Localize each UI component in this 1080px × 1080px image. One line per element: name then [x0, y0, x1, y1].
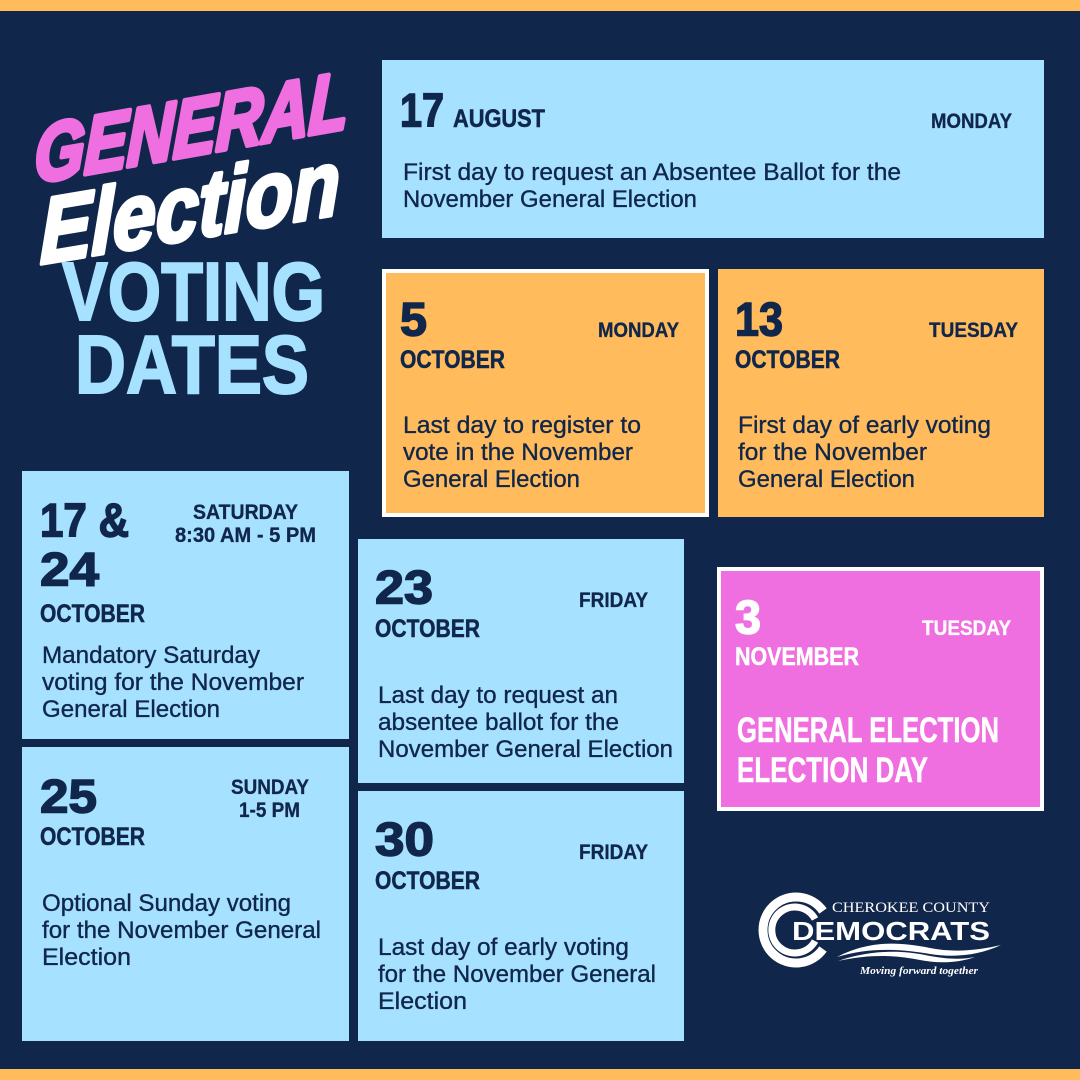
title: Dates: DATES [75, 318, 309, 411]
logo name line: CHEROKEE COUNTY [832, 900, 991, 916]
month: NOVEMBER [735, 643, 859, 671]
title: Voting: VOTING [62, 245, 325, 338]
description: November General Election [378, 736, 673, 763]
weekday and hours [231, 776, 309, 822]
month: OCTOBER [40, 600, 145, 628]
description: vote in the November [403, 439, 633, 466]
description [378, 934, 656, 1015]
icon: waves [837, 944, 1001, 962]
description: First day of early voting [738, 412, 991, 439]
description: for the November [738, 439, 927, 466]
description: ELECTION DAY [737, 751, 928, 790]
description: General Election [403, 466, 580, 493]
description: absentee ballot for the [378, 709, 619, 736]
description: for the November General [378, 961, 656, 988]
month: OCTOBER [735, 346, 840, 374]
logo: Cherokee County Democrats [763, 897, 1001, 977]
bottom accent bar [0, 1069, 1080, 1080]
weekday and hours: SUNDAY [231, 776, 309, 799]
month: OCTOBER [40, 823, 145, 851]
weekday and hours: 1-5 PM [239, 799, 300, 822]
weekday: MONDAY [598, 319, 679, 342]
description: General Election [738, 466, 915, 493]
description: Last day to register to [403, 412, 641, 439]
description: voting for the November [42, 669, 304, 696]
weekday and hours [175, 501, 316, 547]
top accent bar [0, 0, 1080, 11]
date: 25 [40, 770, 97, 822]
weekday: FRIDAY [579, 841, 648, 864]
weekday: FRIDAY [579, 589, 648, 612]
logo wordmark: DEMOCRATS [792, 916, 990, 946]
date: 17 [400, 84, 444, 136]
title: General: GENERAL [33, 55, 350, 201]
description [737, 711, 999, 790]
description [42, 890, 321, 971]
description [403, 159, 901, 213]
panel: 5 October [384, 271, 707, 515]
weekday: MONDAY [931, 110, 1012, 133]
icon: concentric C rings [763, 897, 823, 963]
weekday: TUESDAY [929, 319, 1018, 342]
panel: 30 October [358, 791, 684, 1041]
date: 30 [375, 812, 434, 866]
description: November General Election [403, 186, 697, 213]
month: OCTOBER [375, 615, 480, 643]
weekday and hours: SATURDAY [193, 501, 298, 524]
title: Election: Election [40, 129, 341, 284]
panel: 25 October [22, 747, 349, 1041]
description [738, 412, 991, 493]
description: Mandatory Saturday [42, 642, 260, 669]
month: OCTOBER [400, 346, 505, 374]
description: for the November General [42, 917, 321, 944]
description: Last day of early voting [378, 934, 629, 961]
month: OCTOBER [375, 867, 480, 895]
month: AUGUST [453, 105, 545, 133]
description: Optional Sunday voting [42, 890, 291, 917]
panel: 3 November election day [719, 569, 1042, 809]
title block [33, 55, 350, 411]
description [378, 682, 673, 763]
panel: 23 October [358, 539, 684, 783]
date [40, 494, 129, 596]
date: 5 [400, 292, 427, 346]
date: 3 [735, 590, 761, 644]
description [403, 412, 641, 493]
panel: 17 August [382, 60, 1044, 238]
description: Last day to request an [378, 682, 618, 709]
description: First day to request an Absentee Ballot for the [403, 159, 901, 186]
date: 13 [735, 292, 783, 346]
date: 24 [40, 542, 99, 596]
description: Election [42, 944, 131, 971]
description [42, 642, 304, 723]
logo tagline: Moving forward together [859, 966, 979, 977]
date: 23 [375, 560, 433, 614]
date: 17 & [40, 494, 129, 546]
description: General Election [42, 696, 220, 723]
description: Election [378, 988, 467, 1015]
panel: 17 and 24 October [22, 471, 349, 739]
weekday and hours: 8:30 AM - 5 PM [175, 524, 316, 547]
panel: 13 October [718, 269, 1044, 517]
weekday: TUESDAY [922, 617, 1011, 640]
